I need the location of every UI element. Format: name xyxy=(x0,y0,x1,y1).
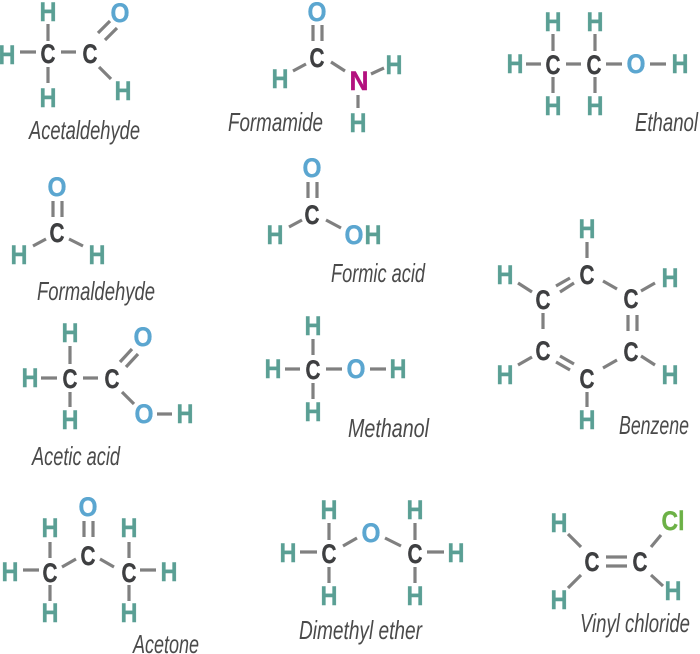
molecule: acetaldehyde xyxy=(0,0,140,145)
molecule: acetic acid: H xyxy=(176,399,194,429)
molecule: formic acid: O xyxy=(302,153,322,183)
molecule: acetic acid xyxy=(22,318,194,471)
molecule: formamide: H xyxy=(272,64,288,94)
molecule: acetone: C xyxy=(80,541,96,571)
molecule: acetaldehyde: C xyxy=(40,39,56,69)
molecule: vinyl chloride: H xyxy=(664,576,682,606)
molecule: dimethyl ether: C xyxy=(408,539,422,569)
molecule: vinyl chloride: Cl xyxy=(662,506,684,536)
molecule: acetone xyxy=(2,492,199,654)
molecule: acetone: H xyxy=(42,513,58,543)
molecule: acetone: H xyxy=(120,598,138,628)
molecule: dimethyl ether: H xyxy=(320,495,338,525)
molecule: benzene: C xyxy=(536,285,550,315)
molecule: benzene xyxy=(496,214,689,440)
molecule: dimethyl ether: Dimethyl ether xyxy=(299,615,423,645)
molecule: ethanol: O xyxy=(626,49,646,79)
molecule: acetic acid: H xyxy=(62,405,78,435)
molecule: methanol: O xyxy=(346,354,366,384)
molecule: dimethyl ether: C xyxy=(322,539,336,569)
molecule: acetone: H xyxy=(120,513,138,543)
molecule: formamide: H xyxy=(350,108,366,138)
molecule: dimethyl ether: H xyxy=(406,581,424,611)
molecule: formamide: C xyxy=(310,43,324,73)
molecule: acetone: H xyxy=(42,598,58,628)
molecule: dimethyl ether: H xyxy=(406,495,424,525)
molecule: formic acid: C xyxy=(304,200,320,230)
molecule: formamide xyxy=(228,0,402,138)
molecule: benzene: H xyxy=(578,214,596,244)
molecule: ethanol: H xyxy=(544,7,562,37)
molecule: benzene: C xyxy=(536,336,550,366)
molecule: ethanol: H xyxy=(544,91,562,121)
molecule: vinyl chloride: C xyxy=(584,547,600,577)
molecule: methanol: H xyxy=(390,354,406,384)
molecule: ethanol: H xyxy=(586,7,604,37)
molecule: acetaldehyde: H xyxy=(114,76,132,106)
molecule: methanol: H xyxy=(304,397,322,427)
molecule: dimethyl ether: H xyxy=(448,538,464,568)
molecule: acetic acid: H xyxy=(62,318,78,348)
molecule: benzene: H xyxy=(662,263,678,293)
molecule: formamide: N xyxy=(350,66,368,96)
molecule: formic acid: Formic acid xyxy=(331,258,426,288)
molecule: formaldehyde: O xyxy=(48,172,66,202)
molecule: benzene: H xyxy=(662,360,678,390)
molecule: acetaldehyde: Acetaldehyde xyxy=(28,115,140,145)
molecule: acetic acid: O xyxy=(134,399,154,429)
molecule: acetic acid: H xyxy=(22,363,38,393)
molecule: benzene: H xyxy=(496,360,514,390)
molecule: benzene: C xyxy=(624,337,638,367)
molecule: benzene: C xyxy=(580,260,594,290)
molecule: vinyl chloride: H xyxy=(550,585,568,615)
molecule: formic acid: H xyxy=(266,220,284,250)
molecule: ethanol: H xyxy=(586,91,604,121)
molecule: formic acid: H xyxy=(364,220,382,250)
molecule: methanol xyxy=(264,311,430,443)
molecule: benzene: H xyxy=(578,405,596,435)
molecule: acetic acid: O xyxy=(134,322,152,352)
molecule: dimethyl ether: H xyxy=(280,538,296,568)
molecule: ethanol: C xyxy=(546,50,560,80)
molecule: vinyl chloride: H xyxy=(550,508,568,538)
molecule: acetaldehyde: C xyxy=(82,39,98,69)
molecule: ethanol xyxy=(506,7,699,137)
molecule: vinyl chloride xyxy=(550,506,690,638)
molecule: methanol: H xyxy=(304,311,322,341)
molecule: acetone: C xyxy=(122,558,136,588)
molecule: formaldehyde: H xyxy=(88,240,106,270)
molecule: acetaldehyde: H xyxy=(40,83,56,113)
molecule: acetic acid: C xyxy=(104,364,120,394)
molecule: formic acid xyxy=(266,153,426,288)
molecule: acetone: H xyxy=(160,557,178,587)
molecule: formaldehyde: C xyxy=(50,218,64,248)
molecule: benzene: C xyxy=(580,364,594,394)
molecule: ethanol: H xyxy=(672,49,688,79)
molecule: formamide: H xyxy=(386,50,402,80)
molecule: ethanol: C xyxy=(586,50,602,80)
molecule: formaldehyde: H xyxy=(10,240,28,270)
molecule: ethanol: H xyxy=(506,49,524,79)
molecule: methanol: C xyxy=(306,355,320,385)
molecule: vinyl chloride: C xyxy=(632,547,648,577)
molecule: formaldehyde xyxy=(10,172,155,306)
molecule: dimethyl ether: H xyxy=(320,581,338,611)
molecule: formaldehyde: Formaldehyde xyxy=(37,276,155,306)
molecule: acetone: O xyxy=(78,492,98,522)
molecule: dimethyl ether: O xyxy=(362,518,380,548)
molecule: formamide: Formamide xyxy=(228,107,323,137)
molecule: acetic acid: C xyxy=(62,364,78,394)
molecule: acetone: C xyxy=(42,558,58,588)
molecule: formic acid: O xyxy=(344,220,364,250)
molecule: acetic acid: Acetic acid xyxy=(31,441,121,471)
molecule: benzene: H xyxy=(496,260,514,290)
molecule: dimethyl ether xyxy=(280,495,464,645)
molecule: benzene: C xyxy=(624,284,638,314)
molecule: methanol: Methanol xyxy=(348,413,430,443)
molecule: methanol: H xyxy=(264,354,282,384)
molecule: acetone: H xyxy=(2,557,18,587)
